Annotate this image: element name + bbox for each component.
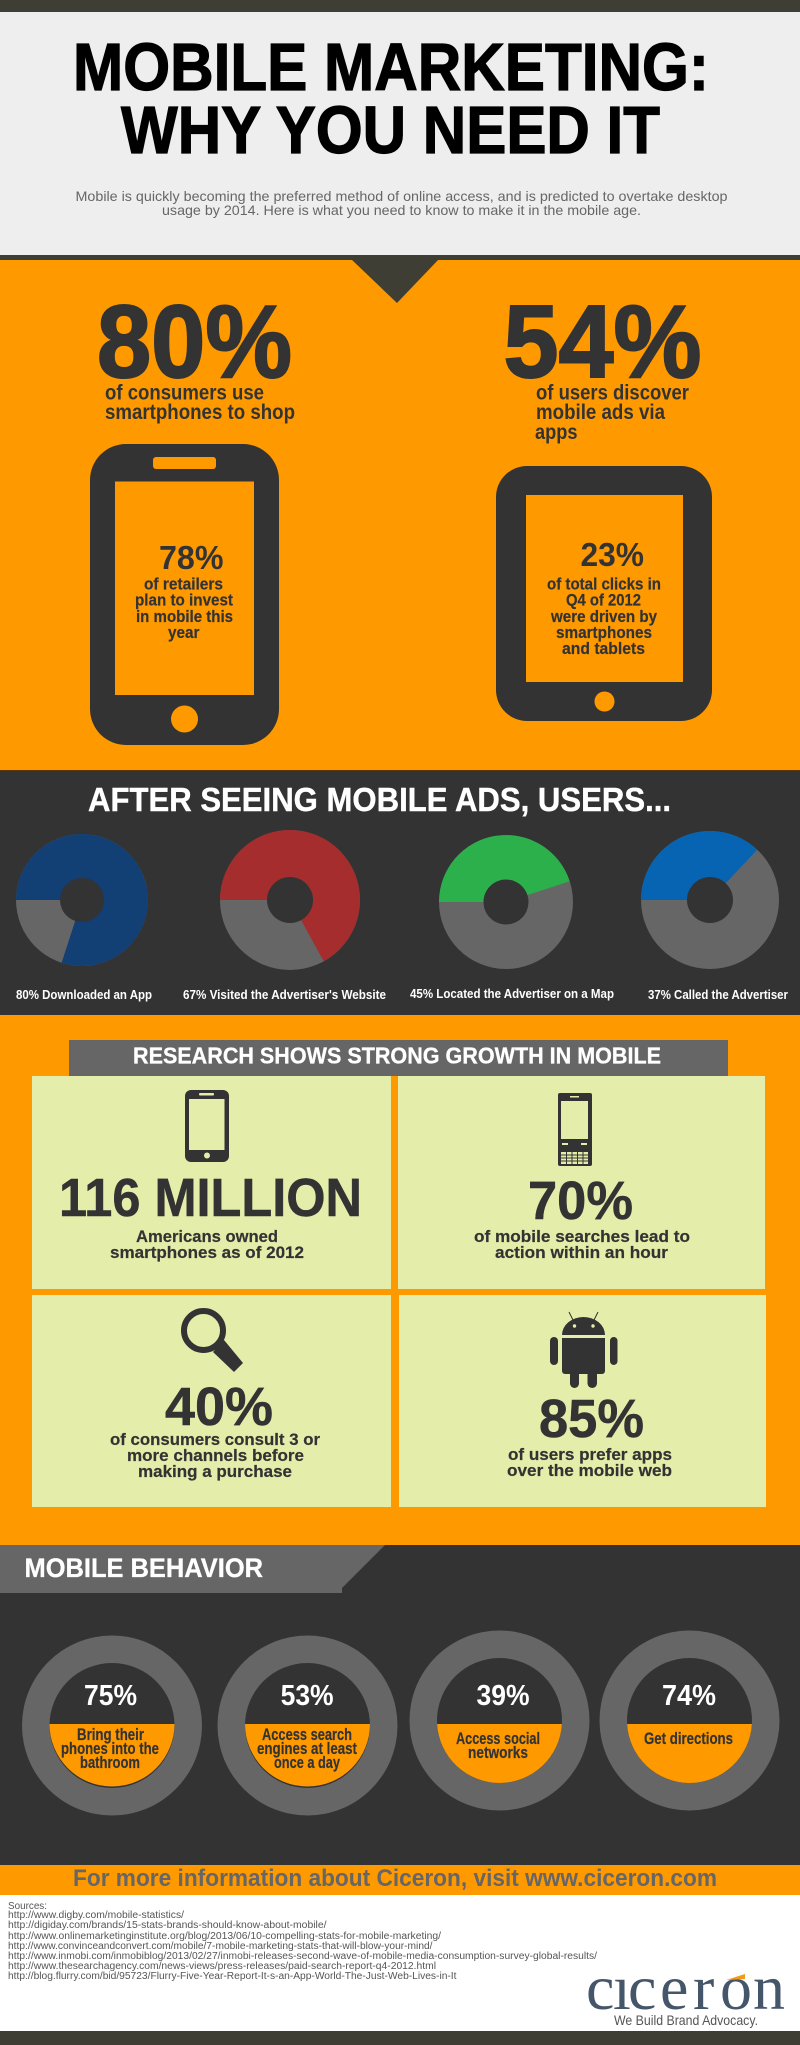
tile: 85 percent: over the mobile web [507, 1461, 672, 1480]
stat: 54 percent: 54% [504, 284, 702, 399]
panel: header [0, 12, 800, 255]
bottom bar [0, 2031, 800, 2045]
call to action banner: For more information about Ciceron, visit www.ciceron.com [73, 1865, 717, 1892]
tile: 116 million: 116 MILLION [59, 1168, 362, 1228]
icon: tablet with 23 percent: 23% [580, 536, 644, 573]
tile: 116 million [32, 1076, 391, 1289]
heading: AFTER SEEING MOBILE ADS, USERS... [88, 781, 671, 818]
tile: 85 percent [399, 1295, 766, 1507]
tile: 40 percent: making a purchase [138, 1462, 292, 1481]
logo: ciceron: ciceron [586, 1952, 785, 2023]
chart: 37 percent called [641, 831, 788, 1002]
sources list: http://www.inmobi.com/inmobiblog/2013/02/27/inmobi-releases-second-wave-of-mobile-media-consumption-survey-global-results/ [8, 1951, 597, 1962]
tile: 40 percent: 40% [165, 1377, 273, 1437]
stat: 54 percent: apps [535, 421, 578, 444]
ring: 75 percent: 75% [84, 1680, 137, 1712]
intro text [76, 188, 728, 218]
panel: research [0, 1015, 800, 1545]
heading banner: MOBILE BEHAVIOR [24, 1553, 263, 1583]
ring: 53 percent: engines at least [257, 1739, 357, 1758]
icon: tablet with 23 percent [496, 466, 712, 721]
ring: 53 percent: Access search [262, 1725, 352, 1744]
chart: 45 percent located on a map [410, 835, 614, 1001]
icon: tablet with 23 percent: smartphones [556, 623, 652, 642]
tile: 70 percent: of mobile searches lead to [474, 1227, 690, 1246]
icon: tablet with 23 percent: of total clicks in [547, 574, 661, 594]
sources list: http://blog.flurry.com/bid/95723/Flurry-Five-Year-Report-It-s-an-App-World-The-Just-Web-Lives-in-It [8, 1971, 457, 1982]
title: WHY YOU NEED IT [121, 93, 660, 168]
tile: 70 percent: action within an hour [495, 1243, 668, 1262]
chart: 45 percent located on a map: 45% Located the Advertiser on a Map [410, 986, 614, 1001]
arrow: header pointer [351, 259, 439, 303]
ring: 39 percent: Access social [456, 1729, 540, 1748]
ring: 74 percent [600, 1630, 780, 1810]
panel: sources and logo [0, 1895, 800, 2031]
ring: 39 percent: 39% [476, 1680, 530, 1712]
icon: smartphone with 78 percent: plan to invest [135, 590, 233, 610]
tile: 40 percent: more channels before [127, 1446, 304, 1465]
panel: mobile behavior [0, 1545, 800, 1865]
tile: 116 million: smartphones as of 2012 [110, 1243, 304, 1262]
title: MOBILE MARKETING: [73, 30, 709, 105]
icon: smartphone with 78 percent [90, 444, 279, 745]
icon: smartphone with 78 percent: 78% [159, 539, 224, 576]
sources list: http://www.onlinemarketinginstitute.org/blog/2013/06/10-compelling-stats-for-mobile-marketing/ [8, 1931, 441, 1942]
ring: 75 percent: bathroom [80, 1753, 140, 1772]
icon: tablet with 23 percent: Q4 of 2012 [566, 590, 641, 610]
ring: 53 percent: once a day [274, 1753, 340, 1772]
ring: 74 percent: 74% [662, 1680, 716, 1712]
tile: 70 percent: 70% [528, 1171, 633, 1231]
stat: 54 percent: of users discover [536, 382, 689, 404]
sources list: http://www.thesearchagency.com/news-views/press-releases/paid-search-report-q4-2012.html [8, 1961, 436, 1972]
intro text: usage by 2014. Here is what you need to know to make it in the mobile age. [162, 202, 641, 218]
sources list: http://digiday.com/brands/15-stats-brands-should-know-about-mobile/ [8, 1920, 327, 1931]
icon: smartphone [185, 1090, 229, 1162]
stat: 80 percent: 80% [97, 284, 292, 399]
ring: 75 percent: Bring their [77, 1725, 144, 1744]
icon: keypad phone [558, 1093, 592, 1166]
tile: 85 percent: of users prefer apps [508, 1445, 672, 1464]
sources list: Sources: [8, 1901, 47, 1912]
stat: 54 percent [504, 284, 702, 444]
stat: 80 percent: of consumers use [105, 382, 264, 404]
icon: tablet with 23 percent: and tablets [562, 639, 645, 658]
ring: 53 percent: 53% [281, 1680, 334, 1712]
sources list: http://www.digby.com/mobile-statistics/ [8, 1910, 184, 1921]
chart: 80 percent downloaded an app: 80% Downloaded an App [16, 987, 152, 1002]
icon: android [550, 1312, 618, 1388]
stat: 80 percent: smartphones to shop [105, 401, 295, 424]
tile: 116 million: Americans owned [136, 1227, 278, 1246]
heading bar [69, 1040, 728, 1076]
chart: 67 percent visited website: 67% Visited the Advertiser's Website [183, 987, 386, 1002]
ring: 53 percent [218, 1636, 398, 1816]
stat: 54 percent: mobile ads via [536, 401, 665, 424]
icon: smartphone with 78 percent: in mobile this [136, 607, 233, 626]
logo: ciceron: We Build Brand Advocacy. [614, 2012, 758, 2028]
panel: after seeing mobile ads [0, 770, 800, 1015]
chart: 80 percent downloaded an app [16, 834, 152, 1002]
ring: 75 percent [22, 1636, 202, 1816]
tile: 70 percent [398, 1076, 765, 1289]
sources list: http://www.convinceandconvert.com/mobile/7-mobile-marketing-stats-that-will-blow-your-mind/ [8, 1941, 433, 1952]
intro text: Mobile is quickly becoming the preferred method of online access, and is predicted to overtake desktop [76, 188, 728, 204]
panel: top statistics [0, 255, 800, 770]
heading bar: RESEARCH SHOWS STRONG GROWTH IN MOBILE [133, 1042, 661, 1068]
ring: 39 percent [410, 1630, 590, 1810]
top bar [0, 0, 800, 12]
sources list [8, 1901, 597, 1982]
heading banner [0, 1545, 385, 1593]
ring: 39 percent: networks [468, 1743, 528, 1762]
icon: smartphone with 78 percent: year [168, 623, 200, 642]
title [73, 30, 709, 168]
tile: 40 percent [32, 1295, 391, 1507]
chart: 67 percent visited website [183, 830, 386, 1002]
tile: 85 percent: 85% [539, 1389, 644, 1449]
icon: magnifying glass [184, 1311, 243, 1372]
ring: 75 percent: phones into the [61, 1739, 159, 1758]
tile: 40 percent: of consumers consult 3 or [110, 1430, 320, 1449]
icon: smartphone with 78 percent: of retailers [144, 574, 223, 594]
icon: tablet with 23 percent: were driven by [550, 607, 657, 626]
ring: 74 percent: Get directions [644, 1729, 733, 1748]
